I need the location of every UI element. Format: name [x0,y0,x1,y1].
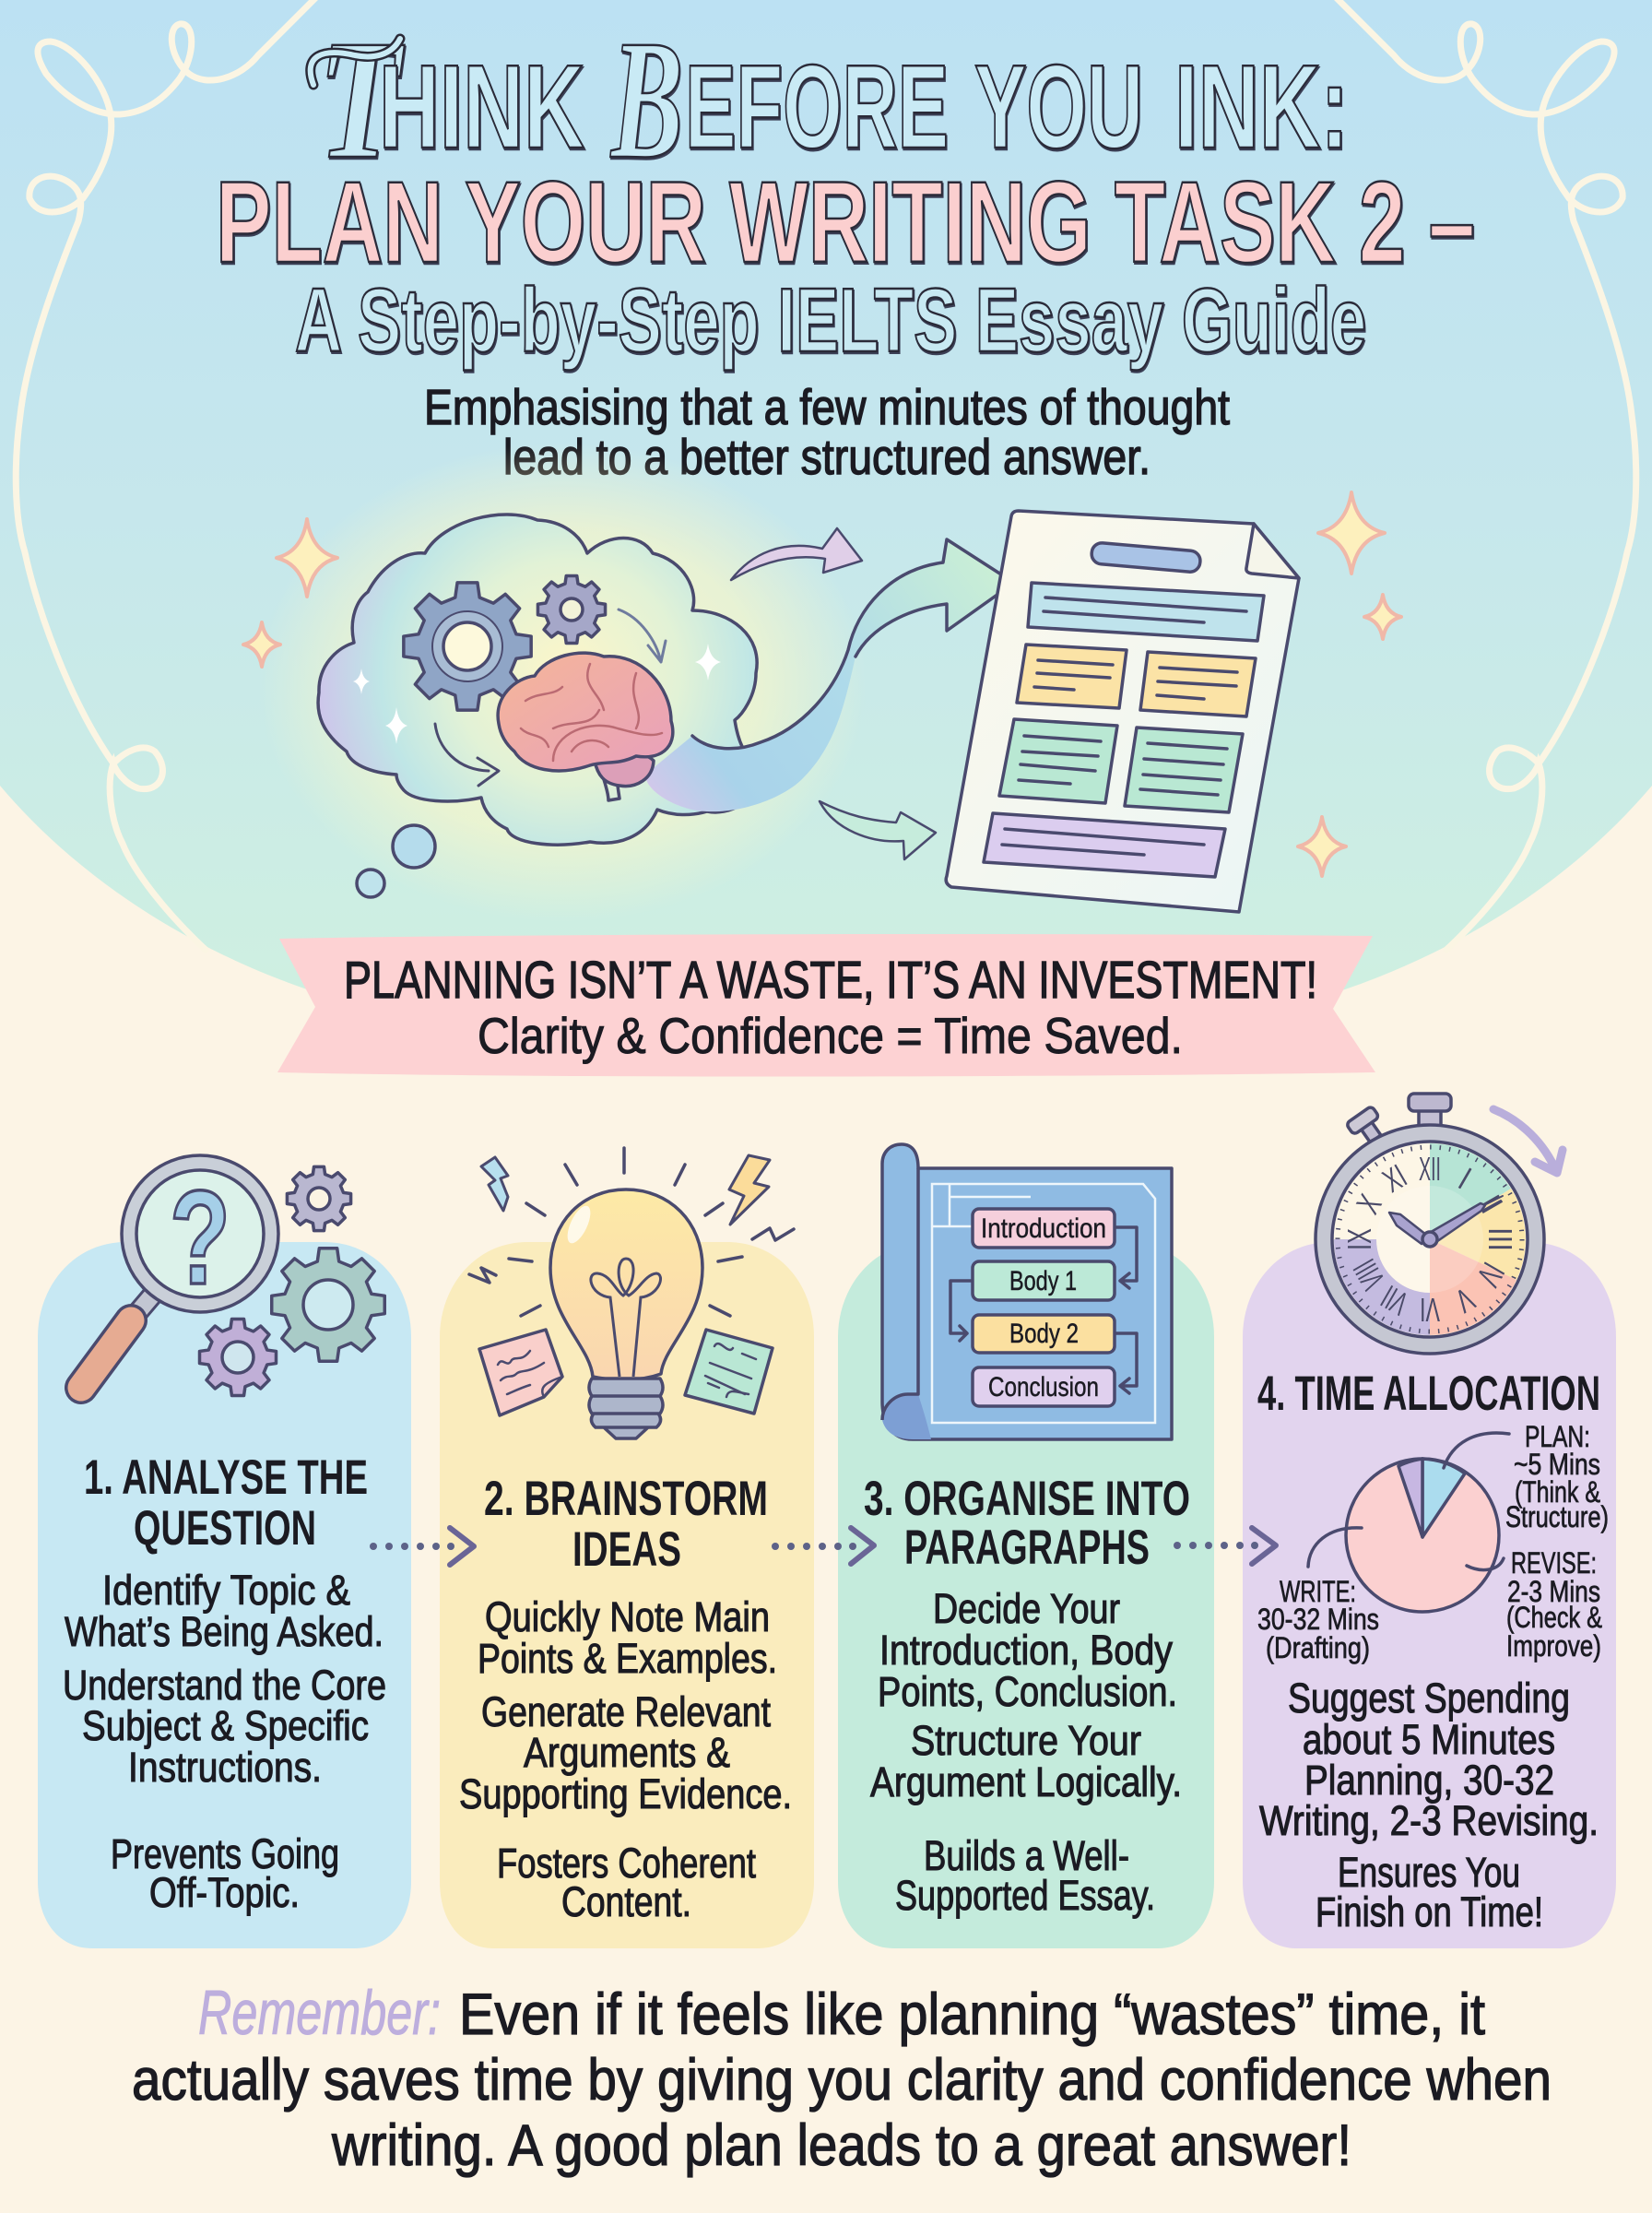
clock numerals: XII [1419,1150,1441,1188]
closing remark: Even if it feels like planning “wastes” time, it [459,1982,1485,2047]
blueprint box: body 2 [973,1315,1115,1353]
body text: Identify Topic & [102,1567,350,1614]
ribbon arrow [645,539,1014,811]
closing remark [132,1978,1552,2178]
title line 1: HINK [379,41,584,173]
heading: 2. BRAINSTORM [484,1472,768,1526]
icon: clockwise arrow [1493,1109,1563,1173]
thought cloud [318,515,765,845]
body text: Builds a Well- [924,1832,1129,1879]
hero illustration [243,443,1401,922]
heading: 1. ANALYSE THE [84,1450,368,1505]
body text [63,1567,386,1916]
body text: Content. [561,1878,691,1925]
blueprint box: body 1: Body 1 [1009,1266,1077,1296]
title line 1: T [318,6,406,195]
small arrow bottom [820,801,936,859]
body text: What’s Being Asked. [65,1608,384,1655]
clock hands [1389,1196,1503,1247]
thought bubbles [357,825,435,897]
body text: Subject & Specific [82,1702,369,1749]
body text: Structure Your [911,1717,1141,1764]
blueprint box: introduction: Introduction [981,1213,1106,1244]
document green blocks [999,719,1243,812]
sparkles [243,492,1401,876]
body text: Supporting Evidence. [459,1770,792,1817]
pie label: plan: PLAN: [1525,1420,1590,1453]
body text: Writing, 2-3 Revising. [1259,1797,1599,1844]
clock numerals: II [1471,1189,1511,1219]
pie chart [1308,1433,1509,1612]
closing remark: Remember: [198,1978,441,2048]
body text: Supported Essay. [895,1872,1155,1919]
body text: Points & Examples. [478,1635,777,1682]
body text: Quickly Note Main [485,1593,770,1640]
heading: QUESTION [134,1501,316,1556]
large gear [404,583,531,710]
clock numerals: XI [1376,1156,1413,1200]
clock numerals: V [1449,1280,1481,1320]
title line 1: EFORE [685,41,949,173]
banner: PLANNING ISN’T A WASTE, IT’S AN INVESTMENT! [344,951,1317,1010]
clock numerals: VIII [1345,1253,1392,1296]
brain [498,653,673,800]
pie label: plan: ~5 Mins [1514,1448,1600,1481]
subtitle: lead to a better structured answer. [503,430,1150,485]
heading: IDEAS [572,1522,681,1577]
pie label: write: (Drafting) [1266,1631,1370,1664]
panel 3: organise into paragraphs [838,1144,1214,1948]
panel 1: analyse the question [38,1155,411,1948]
pie label: write [1257,1575,1379,1664]
body text: Suggest Spending [1288,1675,1570,1722]
small gear [537,575,606,644]
blueprint connectors [950,1227,1137,1393]
body text: Points, Conclusion. [878,1668,1177,1715]
pie label: revise: Improve) [1506,1629,1601,1663]
clock numerals: IX [1340,1228,1378,1250]
clock numerals [1340,1150,1519,1329]
icon: blueprint [882,1144,1172,1439]
body text [459,1593,792,1925]
body text: Decide Your [933,1585,1120,1632]
icon: light rays [469,1148,794,1316]
document summary block [1028,583,1264,641]
body text: Fosters Coherent [497,1840,756,1887]
body text: Arguments & [524,1729,730,1776]
clock numerals: VI [1420,1291,1440,1329]
cloud glow [258,443,867,922]
title line 1 [311,6,1349,195]
body text: Understand the Core [63,1662,386,1709]
pie label: plan: (Think & [1515,1475,1600,1509]
blueprint box: conclusion: Conclusion [988,1372,1099,1402]
heading [484,1472,768,1577]
icon: sticky notes [479,1330,773,1415]
blueprint box: body 2: Body 2 [1009,1319,1079,1349]
blueprint box: conclusion [973,1367,1115,1406]
pie label: plan [1505,1420,1609,1533]
icon: magnifying glass: ? [170,1163,230,1312]
pie label: revise: (Check & [1506,1601,1602,1634]
closing remark: writing. A good plan leads to a great answer! [331,2113,1351,2178]
body text: Instructions. [128,1744,322,1791]
body text: Off-Topic. [149,1869,300,1916]
panel 2: brainstorm ideas [440,1148,814,1948]
body text [1259,1675,1599,1935]
pie label: write: 30-32 Mins [1257,1603,1379,1636]
icon: gears [200,1166,384,1395]
blueprint box: body 1 [973,1261,1115,1300]
panel 4: time allocation [1243,1094,1616,1948]
clock numerals: IV [1469,1256,1513,1293]
document yellow blocks [1017,645,1256,716]
body text: Generate Relevant [481,1688,771,1735]
pie label: write: WRITE: [1280,1575,1356,1608]
header background dome [0,0,1652,1025]
body text [870,1585,1182,1919]
icon: stopwatch [1316,1094,1544,1354]
pie label: revise: 2-3 Mins [1507,1575,1600,1608]
heading [864,1472,1190,1575]
cloud inner arrows [435,609,666,786]
body text: Planning, 30-32 [1304,1757,1554,1804]
icon: light bulb [550,1189,702,1438]
subtitle: Emphasising that a few minutes of thought [424,380,1230,435]
banner: Clarity & Confidence = Time Saved. [478,1007,1183,1064]
pie label: plan: Structure) [1505,1500,1609,1533]
body text: Argument Logically. [870,1758,1182,1805]
heading: 3. ORGANISE INTO [864,1472,1190,1526]
heading [84,1450,368,1556]
clock numerals: I [1453,1160,1478,1197]
clock numerals: X [1349,1189,1389,1220]
heading: PARAGRAPHS [904,1521,1150,1575]
cloud sparkles [353,644,721,744]
document [946,511,1299,912]
decorative swirl right [1334,0,1636,950]
dotted arrow 3 to 4 [1174,1528,1276,1564]
body text: Ensures You [1338,1849,1520,1896]
document purple block [984,813,1225,877]
pie label: revise [1506,1546,1602,1663]
title line 1: B [610,6,683,195]
clock numerals: III [1481,1227,1519,1251]
decorative swirl left [16,0,318,950]
icon: lightning bolts [481,1155,770,1225]
title line 1: INK: [1174,41,1349,173]
icon: magnifying glass [81,1155,278,1388]
dotted arrow 1 to 2 [370,1528,474,1565]
body text: Finish on Time! [1316,1888,1543,1935]
small arrow top [731,528,862,580]
dotted arrow 2 to 3 [772,1528,874,1564]
banner [277,934,1375,1077]
blueprint box: introduction [973,1209,1115,1248]
body text: Prevents Going [111,1830,339,1877]
title line 1: YOU [974,41,1143,173]
body text: Introduction, Body [879,1627,1173,1674]
body text: about 5 Minutes [1303,1716,1555,1763]
subtitle [424,380,1230,485]
pie label: revise: REVISE: [1511,1546,1597,1580]
clock numerals: VII [1375,1278,1414,1323]
